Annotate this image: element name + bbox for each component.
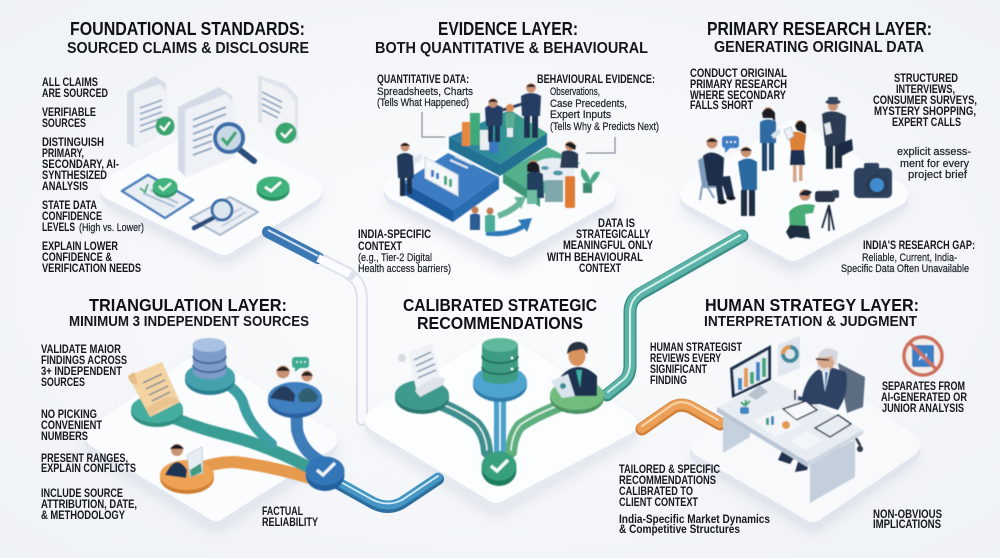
text block: conduct original research: PRIMARY RESEARCH <box>690 78 787 91</box>
platform: calibrated recommendations <box>376 344 626 505</box>
icon: green check button <box>256 176 290 201</box>
node: database base <box>185 363 235 395</box>
text block: triangulation list: ATTRIBUTION, DATE, <box>41 498 137 511</box>
text block: triangulation list: NUMBERS <box>41 430 88 443</box>
heading: foundational standards: SOURCED CLAIMS & DISCLOSURE <box>67 40 309 57</box>
text block: separates from AI: JUNIOR ANALYSIS <box>882 402 964 415</box>
text block: data is meaningful <box>547 217 653 275</box>
person: woman with tablet <box>760 107 781 171</box>
text block: foundational standards list: CONFIDENCE <box>42 210 102 223</box>
icon: database <box>192 338 226 379</box>
text block: explicit assessment: ment for every <box>900 158 969 170</box>
text block: behavioural evidence: Observations, <box>550 86 600 98</box>
text block: india-specific context: Health access barriers) <box>358 263 451 275</box>
icon: clipboard with magnifier <box>190 197 258 235</box>
icon: central document and magnifier <box>178 87 254 178</box>
database stream <box>210 378 272 444</box>
text block: triangulation list: & METHODOLOGY <box>41 509 125 522</box>
text block: separates from AI: SEPARATES FROM <box>882 380 965 393</box>
node: people base <box>268 382 322 418</box>
text block: conduct original research <box>690 67 787 112</box>
text block: conduct original research: WHERE SECONDARY <box>690 89 786 102</box>
text block: triangulation list: NO PICKING <box>41 408 97 421</box>
connector: primary research to calibrated <box>607 235 742 395</box>
heading: triangulation layer <box>69 295 309 330</box>
text block: triangulation list: FINDINGS ACROSS <box>41 354 127 367</box>
icon: checklist clipboard <box>122 175 193 218</box>
orange stream <box>187 462 310 478</box>
text block: foundational standards list: (High vs. Lower) <box>79 222 144 234</box>
icon: camera <box>854 163 892 198</box>
text block: conduct original research: CONDUCT ORIGINAL <box>690 67 787 80</box>
teal stream <box>158 411 310 468</box>
heading: foundational standards <box>67 18 309 57</box>
text block: triangulation list: VALIDATE MAIOR <box>41 343 121 356</box>
text block: foundational standards list: VERIFIABLE <box>42 106 96 119</box>
text block: quantitative data: Spreadsheets, Charts <box>377 86 473 98</box>
person: woman in orange <box>784 120 806 182</box>
illustration: primary research people <box>698 97 892 239</box>
text block: data is meaningful: CONTEXT <box>579 262 621 275</box>
text block: factual reliability: FACTUAL <box>262 505 303 518</box>
text block: foundational standards list: DISTINGUISH <box>42 136 104 149</box>
text block: factual reliability <box>262 505 318 529</box>
report with donut chart <box>778 336 800 377</box>
text block: india's research gap: Reliable, Current, India- <box>862 252 957 264</box>
platform: human strategy layer <box>702 372 908 522</box>
text block: triangulation list: PRESENT RANGES, <box>41 452 128 465</box>
people around table <box>527 141 578 208</box>
person: interviewer <box>738 147 757 216</box>
connector: foundational to calibrated <box>268 230 362 420</box>
platform: evidence layer <box>396 134 605 260</box>
heading: human strategy layer: INTERPRETATION & JUDGMENT <box>704 313 917 330</box>
text block: behavioural evidence: (Tells Why & Predicts Next) <box>550 121 659 133</box>
node: orange base <box>160 460 214 494</box>
text block: research methods: INTERVIEWS, <box>896 83 955 96</box>
text block: india's research gap: Specific Data Often Unavailable <box>841 263 969 275</box>
heading: calibrated strategic recommendations <box>403 295 597 333</box>
text block: data is meaningful: DATA IS <box>598 217 635 230</box>
illustration: triangulation source streams <box>128 338 344 494</box>
heading: calibrated strategic recommendations: CALIBRATED STRATEGIC <box>403 295 597 315</box>
text block: foundational standards list: SECONDARY, AI- <box>42 158 119 171</box>
heading: human strategy layer <box>704 295 919 330</box>
bar chart <box>462 113 498 153</box>
icon: left document stack <box>127 76 174 148</box>
text block: foundational standards list: CONFIDENCE & <box>42 251 112 264</box>
text block: triangulation list: INCLUDE SOURCE <box>41 487 123 500</box>
node: database base <box>473 366 527 402</box>
icon: no AI symbol: AI <box>918 352 928 362</box>
text block: data is meaningful: MEANINGFUL ONLY <box>563 239 653 252</box>
icon: database <box>482 338 518 384</box>
person: photographer with tripod camera <box>786 189 839 239</box>
platform: primary research layer <box>692 132 896 262</box>
illustration: foundational documents and checks <box>122 75 298 235</box>
lower blue step <box>403 153 499 222</box>
text block: human strategist reviews: FINDING <box>650 374 687 387</box>
icon: speech bubble <box>722 136 739 153</box>
node: scroll base <box>395 380 449 414</box>
desk panels <box>723 413 855 503</box>
text block: tailored recommendations: TAILORED & SPECIFIC <box>619 463 720 476</box>
monitor with bar chart <box>730 345 771 400</box>
chair <box>838 363 865 452</box>
text block: foundational standards list: ARE SOURCED <box>42 87 108 100</box>
text block: quantitative data <box>377 73 473 109</box>
text block: foundational standards list: ANALYSIS <box>42 180 88 193</box>
dashboard screen <box>425 156 472 196</box>
heading: triangulation layer: TRIANGULATION LAYER: <box>89 295 287 315</box>
text block: behavioural evidence: Expert Inputs <box>550 109 611 121</box>
heading: evidence layer: BOTH QUANTITATIVE & BEHAVIOURAL <box>375 40 648 57</box>
text block: human strategist reviews: SIGNIFICANT <box>650 363 707 376</box>
text block: research methods: MYSTERY SHOPPING, <box>874 105 976 118</box>
icon: scroll <box>128 362 180 417</box>
text block: explicit assessment <box>897 146 971 181</box>
text block: behavioural evidence <box>537 73 659 133</box>
text block: quantitative data: QUANTITATIVE DATA: <box>377 73 469 86</box>
person: seated interviewee <box>698 138 736 204</box>
heading: evidence layer <box>375 18 648 57</box>
heading: primary research layer: GENERATING ORIGINAL DATA <box>714 39 924 56</box>
text block: triangulation list: EXPLAIN CONFLICTS <box>41 462 136 475</box>
text block: research methods: EXPERT CALLS <box>892 116 961 129</box>
platform: foundational standards <box>112 140 310 254</box>
leader lines <box>422 112 615 153</box>
arrows and small people <box>470 190 537 234</box>
text block: non-obvious implications: NON-OBVIOUS <box>873 508 942 521</box>
text block: foundational standards list: SOURCES <box>42 117 86 130</box>
text block: explicit assessment: project brief <box>908 169 968 181</box>
heading: evidence layer: EVIDENCE LAYER: <box>438 18 578 39</box>
icon: no AI symbol <box>904 337 942 375</box>
legs of strategist <box>778 445 812 472</box>
illustration: calibrated recommendation streams <box>395 338 604 486</box>
icon: two people with chat <box>270 357 318 402</box>
heading: primary research layer: PRIMARY RESEARCH LAYER: <box>707 18 932 39</box>
text block: tailored recommendations: CLIENT CONTEXT <box>619 496 698 509</box>
text block: foundational standards list: EXPLAIN LOWER <box>42 240 118 253</box>
heading: human strategy layer: HUMAN STRATEGY LAYER: <box>705 295 919 315</box>
text block: factual reliability: RELIABILITY <box>262 516 318 529</box>
heading: calibrated strategic recommendations: RECOMMENDATIONS <box>417 313 583 333</box>
text block: human strategist reviews: HUMAN STRATEGIST <box>650 341 742 354</box>
illustration: human strategist at desk <box>717 336 942 503</box>
desk top <box>717 380 863 467</box>
upper blue-green step <box>449 110 547 176</box>
person: man with hat and briefcase <box>822 97 853 169</box>
text block: research methods: STRUCTURED <box>894 72 958 85</box>
text block: human strategist reviews <box>650 341 742 387</box>
text block: behavioural evidence: BEHAVIOURAL EVIDENCE: <box>537 73 655 86</box>
strategist <box>795 348 847 410</box>
text block: foundational standards list: PRIMARY, <box>42 147 84 160</box>
text block: separates from AI <box>881 380 967 415</box>
text block: data is meaningful: WITH BEHAVIOURAL <box>547 251 643 264</box>
text block: non-obvious implications: IMPLICATIONS <box>873 518 941 531</box>
lower green step <box>503 147 580 207</box>
text block: tailored recommendations <box>619 463 770 536</box>
connector: calibrated to human strategy <box>642 402 720 429</box>
icon: person with report <box>165 444 203 478</box>
text block: india's research gap <box>841 239 975 275</box>
heading: primary research layer <box>707 18 932 56</box>
text block: research methods <box>873 72 977 129</box>
node: check <box>482 452 516 486</box>
heading: triangulation layer: MINIMUM 3 INDEPENDENT SOURCES <box>69 313 309 330</box>
text block: triangulation list: 3+ INDEPENDENT <box>41 365 122 378</box>
connector: triangulation to calibrated <box>330 476 438 507</box>
person: analyst with tablet <box>397 143 422 196</box>
text block: foundational standards list: STATE DATA <box>42 199 97 212</box>
text block: foundational standards list <box>42 76 144 275</box>
text block: research methods: CONSUMER SURVEYS, <box>873 94 977 107</box>
node: person base <box>550 380 604 414</box>
text block: quantitative data: (Tells What Happened) <box>377 97 469 109</box>
text block: separates from AI: AI-GENERATED OR <box>881 391 967 404</box>
text block: tailored recommendations: CALIBRATED TO <box>619 485 693 498</box>
illustration: evidence layer stepped data and people <box>397 83 615 234</box>
text block: tailored recommendations: & Competitive Structures <box>619 523 740 536</box>
text block: foundational standards list: SYNTHESIZED <box>42 169 107 182</box>
icon: scroll <box>398 343 445 397</box>
node: check <box>306 456 344 491</box>
stream: scroll to check <box>425 399 487 452</box>
text block: conduct original research: FALLS SHORT <box>690 99 753 112</box>
text block: tailored recommendations: India-Specific Market Dynamics <box>619 513 770 526</box>
person: handshake pair <box>485 83 541 142</box>
text block: tailored recommendations: RECOMMENDATIONS <box>619 474 716 487</box>
text block: foundational standards list: LEVELS <box>42 221 75 234</box>
stream: database to check <box>494 392 506 452</box>
heading: foundational standards: FOUNDATIONAL STANDARDS: <box>70 18 305 39</box>
stream: person to check <box>511 402 570 452</box>
text block: behavioural evidence: Case Precedents, <box>550 98 627 110</box>
text block: foundational standards list: ALL CLAIMS <box>42 76 98 89</box>
text block: india-specific context: (e.g., Tier-2 Digital <box>358 252 432 264</box>
text block: triangulation list <box>41 343 137 522</box>
icon: plant <box>581 168 600 193</box>
text block: explicit assessment: explicit assess- <box>897 146 971 158</box>
text block: triangulation list: CONVENIENT <box>41 419 102 432</box>
platform: triangulation layer <box>96 364 326 522</box>
blue stream <box>296 400 322 462</box>
text block: triangulation list: SOURCES <box>41 376 85 389</box>
text block: india-specific context: INDIA-SPECIFIC <box>358 228 432 241</box>
node: scroll base <box>131 395 183 427</box>
icon: right document <box>258 75 298 144</box>
text block: data is meaningful: STRATEGICALLY <box>576 228 650 241</box>
text block: non-obvious implications <box>873 508 942 531</box>
text block: human strategist reviews: REVIEWS EVERY <box>650 352 721 365</box>
icon: person with laptop <box>551 342 597 398</box>
text block: india-specific context <box>358 228 451 275</box>
desk papers <box>740 400 851 450</box>
text block: india-specific context: CONTEXT <box>358 240 402 253</box>
text block: foundational standards list: VERIFICATION NEEDS <box>42 262 141 275</box>
